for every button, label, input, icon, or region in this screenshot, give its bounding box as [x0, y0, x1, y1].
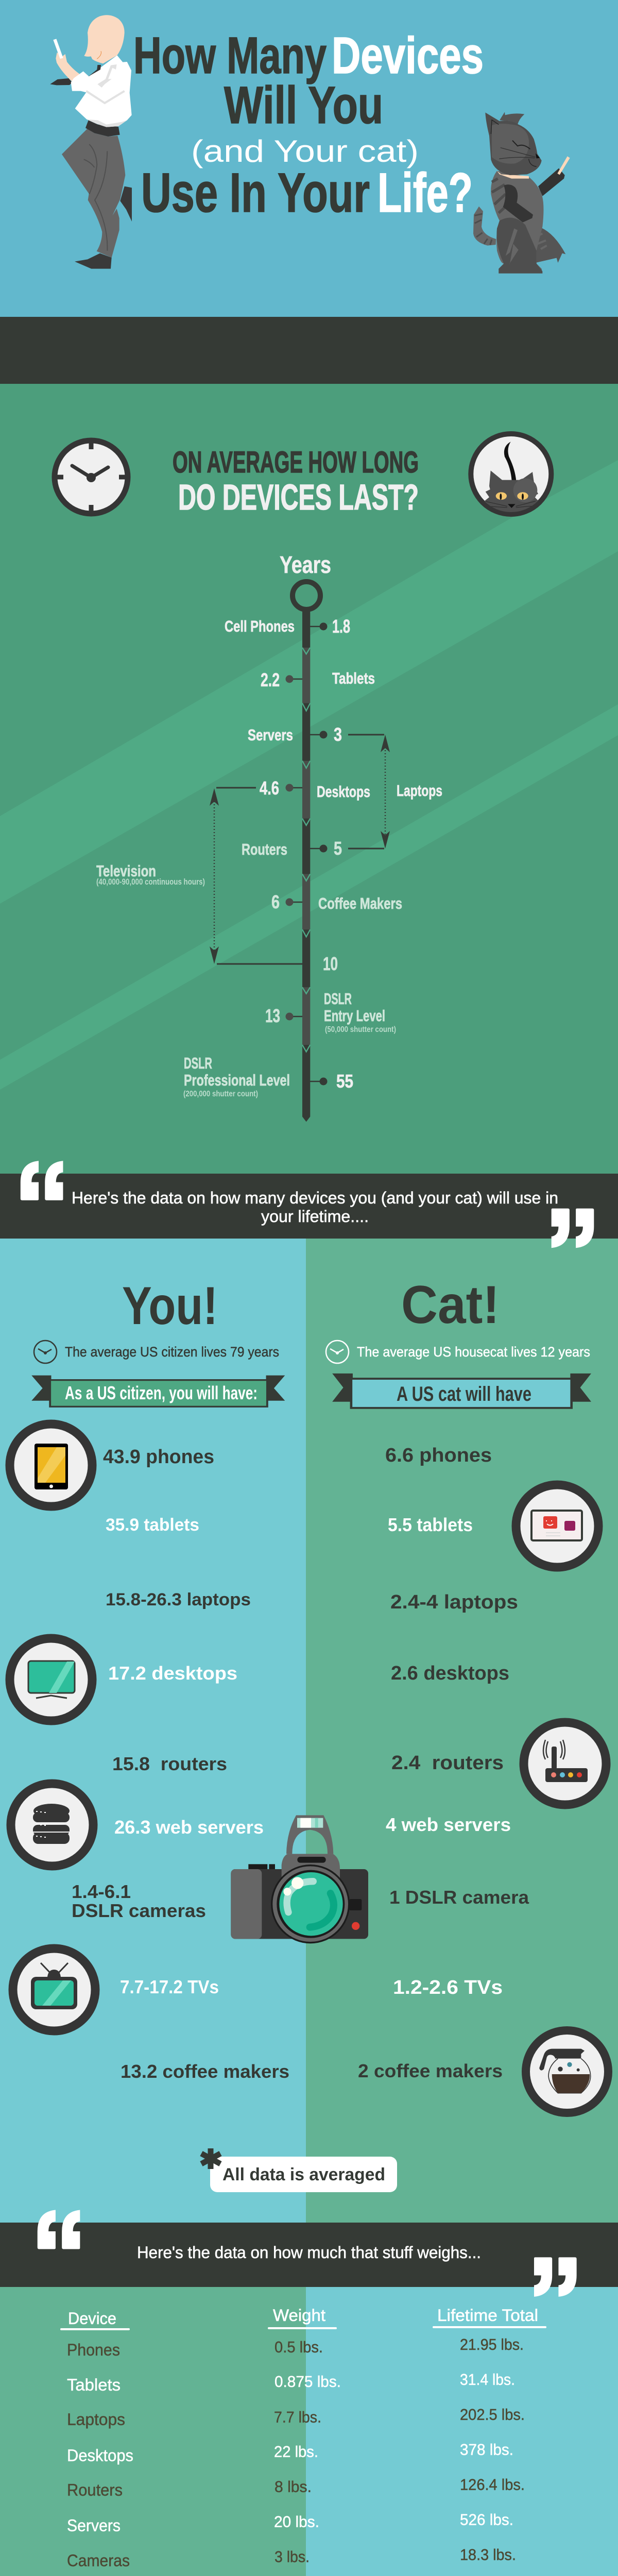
table column: device: Cameras: [67, 2551, 130, 2570]
chart labels: years and devices: [96, 551, 442, 1098]
table column: weight: 0.5 lbs.: [274, 2338, 323, 2356]
icon: small clock: [34, 1341, 57, 1363]
chart labels: years and devices: 4.6: [260, 777, 279, 799]
table column: lifetime total: 31.4 lbs.: [460, 2370, 515, 2388]
stat: coffee makers: 13.2 coffee makers: [121, 2061, 289, 2082]
table headers: [60, 2306, 546, 2330]
table column: lifetime total: 18.3 lbs.: [460, 2546, 516, 2564]
table column: lifetime total: 202.5 lbs.: [460, 2405, 525, 2424]
title text: Life?: [377, 161, 473, 224]
icon: desktop: [10, 1638, 92, 1721]
arrow: laptops range: [348, 735, 390, 849]
panel: device lifespan timeline: [0, 384, 618, 1174]
table column: weight: 3 lbs.: [274, 2548, 310, 2566]
chart labels: years and devices: Desktops: [317, 783, 370, 801]
table column: device: Laptops: [67, 2410, 125, 2429]
chart labels: years and devices: Professional Level: [184, 1071, 290, 1089]
title text: Use In Your: [141, 161, 370, 224]
table column: device: [67, 2341, 171, 2576]
title text: How Many: [133, 27, 327, 84]
chart labels: years and devices: 2.2: [261, 669, 280, 690]
table column: lifetime total: 526 lbs.: [460, 2511, 513, 2529]
table column: lifetime total: 21.95 lbs.: [460, 2335, 524, 2353]
chart labels: years and devices: DSLR: [184, 1054, 212, 1072]
chart labels: years and devices: 10: [323, 953, 338, 974]
arrow: television range: [210, 788, 302, 964]
icon: closing quote: [534, 2257, 577, 2297]
icon: tv: [13, 1948, 95, 2031]
stat: routers: 15.8 routers: [112, 1753, 227, 1774]
column: cat: [326, 1275, 608, 2113]
stat: dslr cameras: [72, 1881, 206, 1921]
table headers: Device: [68, 2309, 116, 2328]
icon: small clock white: [326, 1341, 349, 1363]
icon: coffee pot: [526, 2030, 608, 2113]
table column: device: Desktops: [67, 2446, 133, 2465]
ribbon: a us cat: [332, 1374, 591, 1408]
stat: coffee makers: 2 coffee makers: [358, 2060, 503, 2081]
ribbon: a us cat: A US cat will have: [397, 1383, 531, 1405]
text: intro quote: Here's the data on how many devices you (and your cat) will use in: [72, 1189, 558, 1207]
heading: you: You!: [122, 1276, 218, 1336]
table headers: Lifetime Total: [437, 2306, 538, 2325]
chart labels: years and devices: 55: [336, 1071, 353, 1092]
chart labels: years and devices: Years: [280, 551, 331, 578]
icon: opening quote: [38, 2210, 80, 2249]
chart labels: years and devices: Servers: [248, 726, 293, 744]
text: intro quote: your lifetime....: [261, 1207, 369, 1226]
stat: phones: 6.6 phones: [385, 1445, 492, 1466]
stat: web servers: 26.3 web servers: [114, 1817, 264, 1838]
chart labels: years and devices: 5: [334, 838, 342, 859]
icon: tablet: [516, 1485, 598, 1567]
chart labels: years and devices: 13: [265, 1005, 280, 1026]
chart labels: years and devices: Coffee Makers: [318, 894, 402, 912]
chart labels: years and devices: (200,000 shutter count): [183, 1090, 258, 1098]
stat: dslr camera: 1 DSLR camera: [389, 1887, 529, 1908]
table headers: Weight: [273, 2306, 325, 2325]
banner: devices quote: [0, 1161, 618, 1248]
illustration: cat with phone: [473, 112, 570, 274]
panel: you vs cat comparison background: [0, 1239, 618, 2223]
note: all data is averaged: [201, 2148, 397, 2192]
chart labels: years and devices: Television: [96, 862, 156, 880]
icon: phone: [10, 1424, 92, 1506]
table column: weight: 22 lbs.: [274, 2443, 318, 2461]
chart labels: years and devices: 6: [271, 891, 280, 912]
icon: dslr camera: [231, 1815, 368, 1943]
dark band: [0, 317, 618, 384]
table column: weight: 0.875 lbs.: [274, 2372, 341, 2391]
table column: lifetime total: 378 lbs.: [460, 2441, 513, 2459]
chart labels: years and devices: 3: [334, 724, 342, 745]
title text: (and Your cat): [191, 134, 419, 168]
chart labels: years and devices: Laptops: [397, 782, 442, 800]
icon: closing quote: [552, 1209, 594, 1248]
table column: lifetime total: 126.4 lbs.: [460, 2476, 525, 2494]
chart labels: years and devices: DSLR: [324, 990, 352, 1008]
stat: tvs: 1.2-2.6 TVs: [393, 1977, 503, 1998]
chart labels: years and devices: (50,000 shutter count): [325, 1025, 396, 1034]
stat: routers: 2.4 routers: [391, 1752, 504, 1774]
title text: Will You: [224, 76, 383, 134]
table column: weight: 20 lbs.: [274, 2513, 319, 2531]
stat: web servers: 4 web servers: [386, 1814, 511, 1835]
chart labels: years and devices: Entry Level: [324, 1007, 385, 1025]
table column: weight: [274, 2338, 341, 2576]
stat: tablets: 35.9 tablets: [106, 1515, 199, 1535]
chart labels: years and devices: (40,000-90,000 continuous hours): [96, 877, 205, 887]
chart labels: years and devices: Tablets: [332, 669, 375, 687]
ribbon: as a us citizen: [31, 1376, 285, 1406]
panel: title header: [0, 0, 618, 317]
heading: on average how long: ON AVERAGE HOW LONG: [173, 446, 419, 479]
illustration: man with phone: [50, 15, 132, 269]
heading: cat: Cat!: [401, 1275, 500, 1335]
heading: on average how long: DO DEVICES LAST?: [178, 477, 419, 517]
stat: tablets: 5.5 tablets: [388, 1514, 473, 1535]
stat: dslr cameras: DSLR cameras: [72, 1900, 206, 1921]
ribbon: as a us citizen: As a US citizen, you will have:: [65, 1382, 258, 1403]
stat: desktops: 17.2 desktops: [108, 1663, 237, 1684]
note: all data is averaged: All data is averaged: [222, 2165, 385, 2184]
table column: device: Servers: [67, 2516, 121, 2535]
text: housecat lifespan: The average US housecat lives 12 years: [357, 1344, 590, 1360]
stat: tvs: 7.7-17.2 TVs: [120, 1976, 219, 1997]
stat: dslr cameras: 1.4-6.1: [72, 1881, 131, 1902]
table column: lifetime total: [460, 2335, 525, 2576]
stat: laptops: 2.4-4 laptops: [390, 1591, 518, 1613]
table column: weight: 8 lbs.: [274, 2478, 312, 2496]
stat: laptops: 15.8-26.3 laptops: [106, 1590, 251, 1609]
icon: opening quote: [21, 1161, 63, 1200]
icon: asterisk: [201, 2148, 220, 2169]
column: you: [10, 1276, 289, 2082]
text: us citizen lifespan: The average US citizen lives 79 years: [65, 1344, 279, 1360]
table column: device: Phones: [67, 2341, 120, 2359]
heading: on average how long: [173, 446, 419, 517]
table column: weight: 7.7 lbs.: [274, 2408, 321, 2426]
text: intro quote: [72, 1189, 558, 1226]
icon: cat peeking in circle: [471, 434, 551, 517]
chart labels: years and devices: Cell Phones: [225, 617, 295, 635]
icon: server: [11, 1784, 93, 1866]
panel: weights table: [0, 2257, 618, 2576]
text: weight quote: Here's the data on how much that stuff weighs...: [137, 2243, 481, 2262]
icon: clock: [55, 440, 128, 514]
icon: router: [524, 1722, 606, 1805]
stat: phones: 43.9 phones: [103, 1446, 214, 1468]
stat: desktops: 2.6 desktops: [391, 1663, 509, 1684]
table column: device: Tablets: [67, 2376, 121, 2394]
title text: [133, 27, 484, 224]
title text: Devices: [332, 27, 484, 84]
chart labels: years and devices: Routers: [242, 840, 287, 858]
table column: device: Routers: [67, 2481, 123, 2499]
chart labels: years and devices: 1.8: [332, 616, 350, 637]
banner: weight quote: [0, 2210, 618, 2287]
chart: timeline spine: [285, 582, 328, 1122]
